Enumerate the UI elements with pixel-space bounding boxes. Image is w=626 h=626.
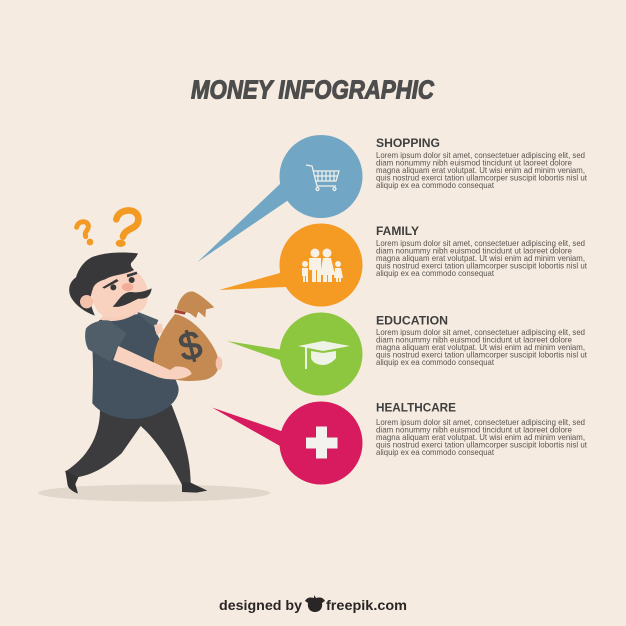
money bag top — [177, 291, 214, 318]
footer credit: freepik.com — [326, 597, 407, 613]
bubble: healthcare — [212, 402, 362, 484]
far sleeve — [137, 312, 158, 332]
text block: education — [376, 316, 588, 367]
near sleeve — [85, 320, 127, 362]
eyes and brows — [102, 272, 137, 290]
icon: graduation cap — [298, 341, 350, 369]
head — [92, 266, 148, 317]
text block: shopping: magna aliquam erat volutpat. Ut wisi enim ad minim veniam, — [376, 165, 585, 175]
text block: healthcare: quis nostrud exerci tation ullamcorper suscipit lobortis nisl ut — [376, 440, 588, 450]
text block: family: aliquip ex ea commodo consequat — [376, 268, 495, 278]
money bag neck — [174, 309, 186, 315]
text block: family: diam nonummy nibh euismod tincidunt ut laoreet dolore — [376, 246, 572, 256]
text block: family: quis nostrud exerci tation ullamcorper suscipit lobortis nisl ut — [376, 260, 588, 270]
far hand — [216, 357, 222, 370]
text block: healthcare: aliquip ex ea commodo consequat — [376, 447, 495, 457]
text block: healthcare: Lorem ipsum dolor sit amet, consectetuer adipiscing elit, sed — [376, 417, 585, 427]
bubble: shopping — [198, 135, 362, 262]
icon: question marks — [77, 210, 138, 237]
text block: healthcare: diam nonummy nibh euismod tincidunt ut laoreet dolore — [376, 424, 572, 434]
text block: family: FAMILY — [376, 226, 419, 238]
icon: family — [302, 248, 343, 282]
nose — [122, 283, 133, 291]
text block: healthcare: magna aliquam erat volutpat. Ut wisi enim ad minim veniam, — [376, 432, 585, 442]
text block: healthcare: HEALTHCARE — [376, 402, 456, 414]
text block: education: Lorem ipsum dolor sit amet, consectetuer adipiscing elit, sed — [376, 327, 585, 337]
shoes — [65, 471, 207, 494]
near arm and hand — [113, 346, 192, 379]
icon: question mark dots — [87, 239, 126, 247]
text block: healthcare — [376, 402, 588, 457]
text block: shopping — [376, 138, 588, 190]
text block: family: Lorem ipsum dolor sit amet, consectetuer adipiscing elit, sed — [376, 238, 585, 248]
money bag — [154, 314, 219, 381]
torso — [92, 314, 179, 419]
text block: education: magna aliquam erat volutpat. Ut wisi enim ad minim veniam, — [376, 342, 585, 352]
bubble: education — [227, 312, 362, 396]
text block: education: aliquip ex ea commodo consequat — [376, 357, 495, 367]
far arm — [154, 323, 163, 335]
text block: family: magna aliquam erat volutpat. Ut wisi enim ad minim veniam, — [376, 253, 585, 263]
text block: education: quis nostrud exerci tation ullamcorper suscipit lobortis nisl ut — [376, 350, 588, 360]
ear — [80, 295, 93, 308]
footer credit: designed by — [219, 597, 302, 613]
text block: family — [376, 226, 588, 278]
neck and collar — [100, 308, 137, 321]
dollar sign: $ — [174, 322, 207, 370]
ground shadow — [38, 484, 270, 502]
footer credit — [219, 595, 407, 613]
bubble: family — [219, 224, 362, 306]
text block: shopping: SHOPPING — [376, 138, 440, 150]
text block: education: EDUCATION — [376, 316, 448, 328]
legs — [65, 405, 191, 485]
hair — [69, 253, 138, 316]
text block: shopping: quis nostrud exerci tation ullamcorper suscipit lobortis nisl ut — [376, 172, 588, 182]
icon: freepik logo — [305, 595, 325, 612]
text block: education: diam nonummy nibh euismod tincidunt ut laoreet dolore — [376, 334, 572, 344]
moustache — [113, 288, 152, 307]
text block: shopping: diam nonummy nibh euismod tincidunt ut laoreet dolore — [376, 158, 572, 168]
title: MONEY INFOGRAPHIC — [191, 74, 435, 104]
character: man carrying money bag — [65, 210, 222, 494]
text block: shopping: Lorem ipsum dolor sit amet, consectetuer adipiscing elit, sed — [376, 150, 585, 160]
icon: cross — [306, 426, 338, 458]
text block: shopping: aliquip ex ea commodo consequat — [376, 180, 495, 190]
icon: shopping cart — [306, 165, 339, 190]
